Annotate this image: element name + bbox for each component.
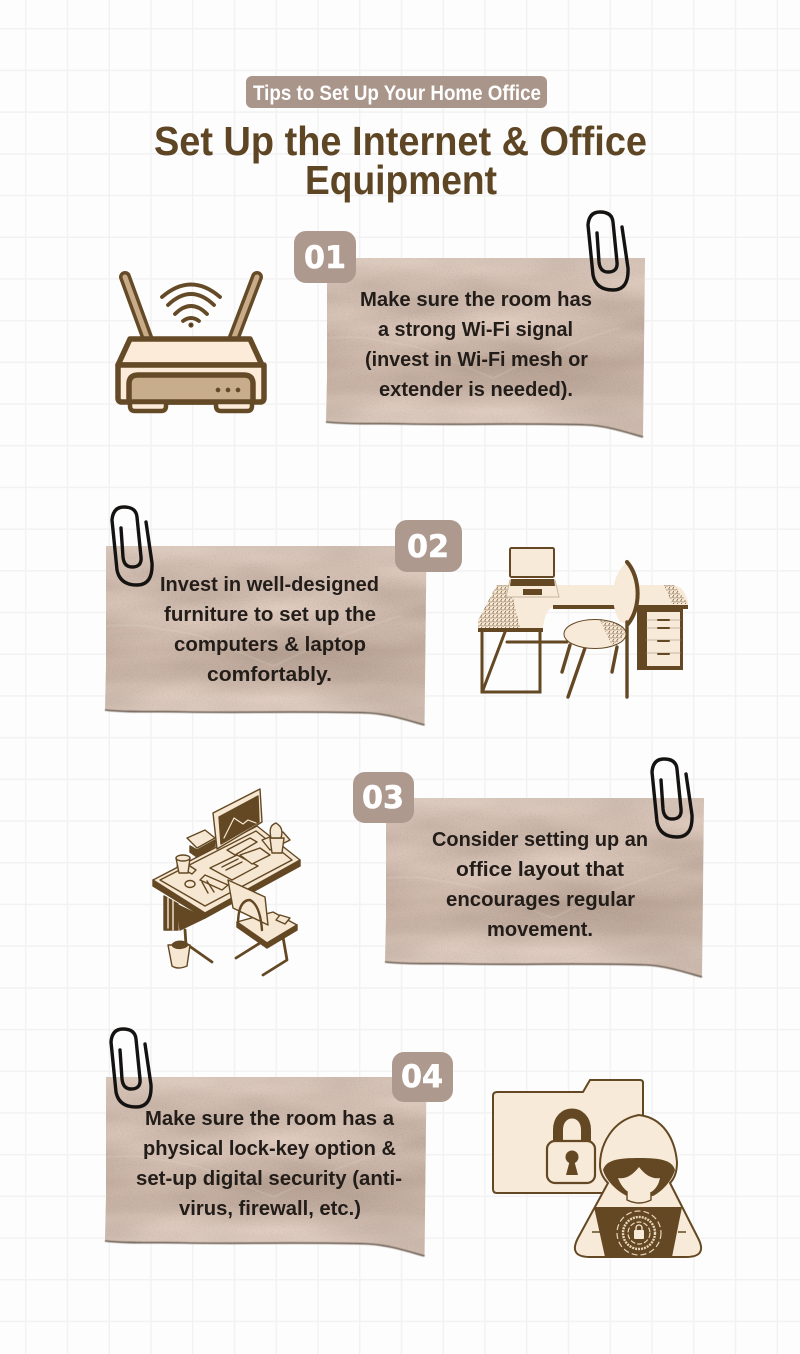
badge 03: 03 xyxy=(362,780,404,816)
title: Equipment xyxy=(305,157,497,203)
text: step 4: virus, firewall, etc.) xyxy=(179,1198,361,1220)
text: step 2 xyxy=(160,574,379,686)
icon: desk with laptop and chair xyxy=(478,548,688,697)
badge 04: 04 xyxy=(401,1059,443,1095)
paperclip 1 xyxy=(588,212,628,290)
badge 03 xyxy=(353,772,414,823)
panel: step 1 xyxy=(294,212,645,437)
text: step 2: furniture to set up the xyxy=(164,604,376,626)
paper note 2 xyxy=(105,546,427,725)
text: step 4: set-up digital security (anti- xyxy=(136,1168,402,1190)
title xyxy=(154,118,647,203)
text: step 1: (invest in Wi-Fi mesh or xyxy=(365,349,588,371)
badge 02 xyxy=(395,520,462,572)
text: step 4: Make sure the room has a xyxy=(145,1108,395,1130)
badge 01: 01 xyxy=(304,240,346,276)
text: step 2: Invest in well-designed xyxy=(160,574,379,596)
text: step 2: comfortably. xyxy=(207,664,332,686)
text: step 3: office layout that xyxy=(456,859,624,881)
text: step 3: Consider setting up an xyxy=(432,829,648,851)
badge 02: 02 xyxy=(407,529,449,565)
paper note 1 xyxy=(326,258,645,437)
icon: locked folder and hooded hacker xyxy=(493,1080,701,1257)
text: step 3 xyxy=(432,829,648,941)
panel: step 2 xyxy=(105,507,462,725)
badge 04 xyxy=(392,1052,453,1102)
paperclip 3 xyxy=(652,759,692,837)
text: step 1: a strong Wi-Fi signal xyxy=(378,319,573,341)
subtitle pill: Tips to Set Up Your Home Office xyxy=(253,81,541,105)
text: step 1: extender is needed). xyxy=(379,379,573,401)
text: step 1 xyxy=(360,289,592,401)
badge 01 xyxy=(294,231,356,283)
icon: wifi router xyxy=(118,277,264,411)
paperclip 4 xyxy=(111,1029,151,1107)
text: step 4 xyxy=(136,1108,402,1220)
paper note 3 xyxy=(385,798,704,977)
subtitle pill xyxy=(246,76,547,108)
text: step 2: computers & laptop xyxy=(174,634,366,656)
title: Set Up the Internet & Office xyxy=(154,118,647,164)
text: step 3: encourages regular xyxy=(446,889,635,911)
paper note 4 xyxy=(105,1077,427,1256)
paperclip 2 xyxy=(112,507,152,585)
hacker xyxy=(575,1115,701,1257)
panel: step 3 xyxy=(353,759,704,977)
panel: step 4 xyxy=(105,1029,453,1256)
icon: isometric workstation xyxy=(153,789,300,975)
folder xyxy=(493,1080,643,1193)
text: step 3: movement. xyxy=(487,919,593,941)
padlock xyxy=(547,1114,595,1183)
text: step 4: physical lock-key option & xyxy=(143,1138,396,1160)
text: step 1: Make sure the room has xyxy=(360,289,592,311)
